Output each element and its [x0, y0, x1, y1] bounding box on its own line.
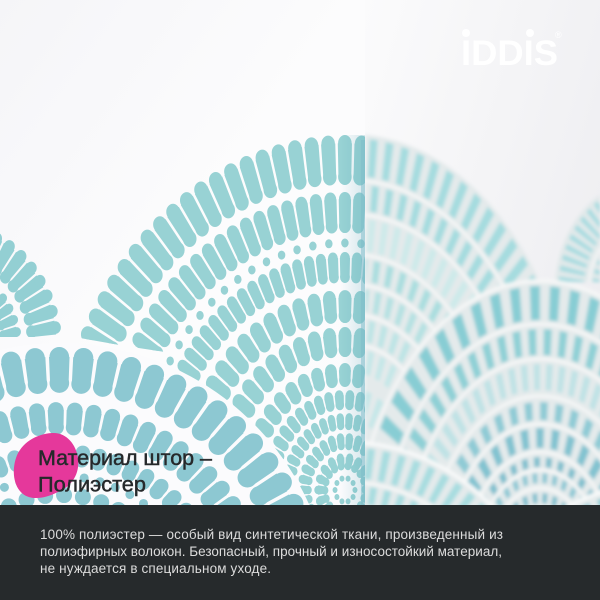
pattern: blurred central right fan [372, 277, 600, 505]
logo: IDDIS: ® [555, 30, 562, 40]
heading: Материал штор – [38, 447, 212, 470]
pattern: blurred top right fan [556, 198, 600, 284]
panel: description bar [0, 505, 600, 600]
pattern: blurred bottom right fan [562, 488, 600, 505]
pattern: large central fan [80, 135, 365, 505]
description text: не нуждается в специальном уходе. [40, 561, 271, 576]
pattern: blurred upper fan [365, 134, 538, 441]
pattern: small fan top left [0, 234, 61, 337]
logo: IDDIS: IDDIS [461, 34, 558, 73]
pattern: lower left fan [0, 347, 310, 505]
fabric fold edge [361, 140, 365, 505]
panel: blurred fabric close-up [365, 0, 600, 505]
icon: pink blob [14, 433, 78, 498]
description text: 100% полиэстер — особый вид синтетической ткани, произведенный из [40, 527, 503, 542]
description text: полиэфирных волокон. Безопасный, прочный и износостойкий материал, [40, 544, 502, 559]
heading: Полиэстер [38, 474, 146, 496]
description text [40, 527, 503, 576]
pattern: blurred lower left fan [365, 440, 492, 505]
heading [38, 447, 212, 496]
panel: sharp fabric close-up [0, 0, 365, 505]
